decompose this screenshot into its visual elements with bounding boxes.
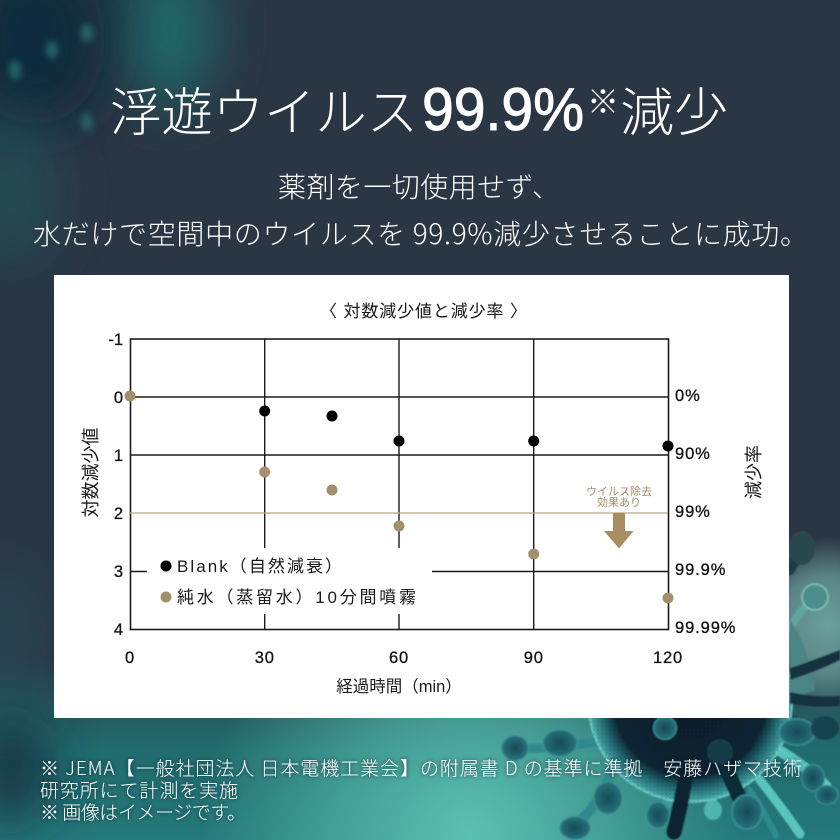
data points: pure water: [124, 390, 674, 604]
left axis labels: 4: [114, 621, 123, 639]
legend: Blank（自然減衰）: [177, 557, 342, 576]
bottom axis labels: 90: [524, 649, 544, 667]
left axis labels: 3: [114, 563, 123, 581]
title: 減少: [620, 71, 728, 146]
right axis labels: 99.99%: [675, 619, 736, 637]
title: 浮遊ウイルス: [110, 71, 418, 146]
bottom axis labels: 60: [389, 649, 409, 667]
callout: virus removal effect: [586, 484, 652, 509]
legend: [160, 557, 416, 607]
right axis labels: 99%: [675, 503, 711, 521]
bottom axis labels: 120: [653, 649, 683, 667]
title: 99.9%: [422, 76, 584, 143]
title: ※: [587, 77, 619, 123]
title: [110, 71, 728, 146]
subtitle: [33, 166, 808, 253]
right axis labels: 90%: [675, 445, 711, 463]
left axis labels: 0: [114, 389, 123, 407]
subtitle: 薬剤を一切使用せず、: [278, 166, 560, 206]
left axis labels: 2: [114, 505, 123, 523]
chart title: 〈 対数減少値と減少率 〉: [320, 302, 527, 321]
left axis labels: -1: [108, 331, 123, 349]
footnote: [40, 754, 802, 825]
right axis title: 減少率: [744, 445, 764, 499]
left axis labels: 1: [114, 447, 123, 465]
right axis labels: 99.9%: [675, 561, 726, 579]
footnote: ※ JEMA【一般社団法人 日本電機工業会】の附属書 D の基準に準拠 安藤ハザマ技術: [40, 754, 802, 781]
callout: virus removal effect: ウイルス除去: [586, 484, 652, 498]
panel: chart: [54, 275, 789, 718]
bottom axis labels: 0: [125, 649, 135, 667]
callout: virus removal effect: 効果あり: [597, 496, 641, 509]
footnote: 研究所にて計測を実施: [40, 776, 238, 803]
subtitle: 水だけで空間中のウイルスを 99.9%減少させることに成功。: [33, 213, 808, 253]
footnote: ※ 画像はイメージです。: [40, 798, 246, 825]
right axis labels: 0%: [675, 387, 701, 405]
grid lines: [130, 339, 668, 630]
bottom axis labels: 30: [255, 649, 275, 667]
legend: 純水（蒸留水）10分間噴霧: [177, 588, 416, 607]
bottom axis labels: [125, 649, 683, 667]
x axis title: 経過時間（min）: [336, 677, 462, 696]
right axis labels: [675, 387, 736, 637]
arrow: down: [604, 513, 634, 548]
virus illustration: [501, 531, 840, 840]
threshold line: [130, 512, 668, 514]
left axis labels: [108, 331, 123, 639]
data points: blank: [259, 406, 674, 452]
left axis title: 対数減少値: [81, 428, 101, 518]
